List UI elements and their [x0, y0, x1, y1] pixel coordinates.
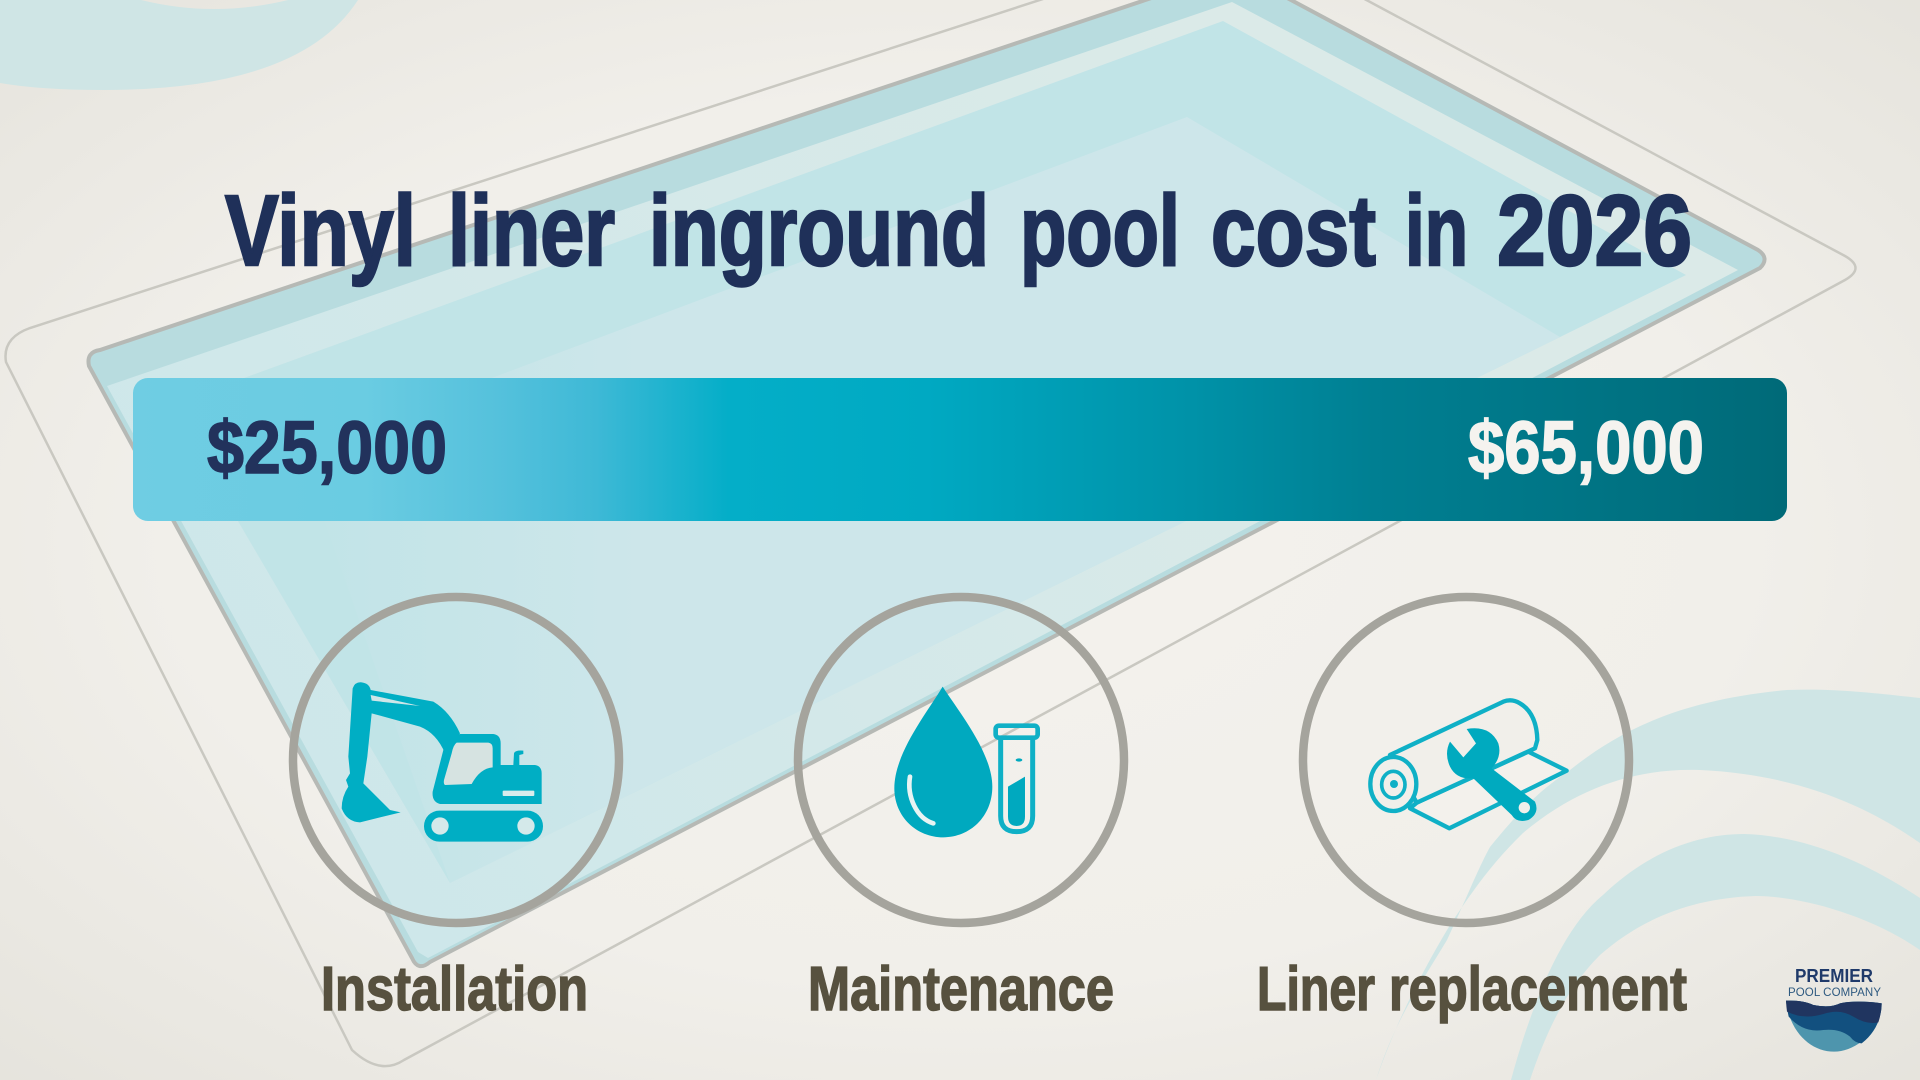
circle: [293, 597, 619, 923]
title: inground: [649, 175, 989, 287]
pool floor strip: [107, 2, 1738, 958]
title: cost: [1211, 175, 1376, 287]
cost range bar: [133, 378, 1787, 521]
icon: water drop and test tube: [894, 687, 1038, 837]
pool mid water: [170, 21, 1686, 883]
circle: [798, 597, 1124, 923]
pool wall band: [88, 0, 1765, 966]
item: installation: [293, 597, 619, 1024]
title: pool: [1020, 175, 1180, 287]
title: [225, 175, 1692, 287]
item: liner replacement: [1257, 597, 1687, 1024]
logo: Premier Pool Company: [1786, 966, 1882, 1052]
icon: liner roll and wrench: [1370, 700, 1567, 828]
logo name: PREMIER: [1795, 966, 1873, 986]
label: Installation: [321, 955, 588, 1024]
title: Vinyl: [225, 175, 416, 287]
item: maintenance: [798, 597, 1124, 1024]
maximum cost: $65,000: [1468, 406, 1704, 489]
logo waves: [1786, 1001, 1882, 1052]
label: Maintenance: [808, 955, 1114, 1024]
waves: bottom right: [1376, 690, 1920, 1080]
title: liner: [448, 175, 615, 287]
logo subtitle: POOL COMPANY: [1788, 987, 1881, 999]
minimum cost: $25,000: [207, 406, 447, 489]
title: 2026: [1497, 175, 1692, 287]
icon: excavator: [342, 682, 543, 842]
title: in: [1405, 175, 1468, 287]
label: replacement: [1389, 955, 1687, 1024]
wave: top left: [0, 0, 358, 90]
label: Liner: [1257, 955, 1375, 1024]
label: [1257, 955, 1687, 1024]
pool light water: [300, 117, 1560, 883]
circle: [1303, 597, 1629, 923]
